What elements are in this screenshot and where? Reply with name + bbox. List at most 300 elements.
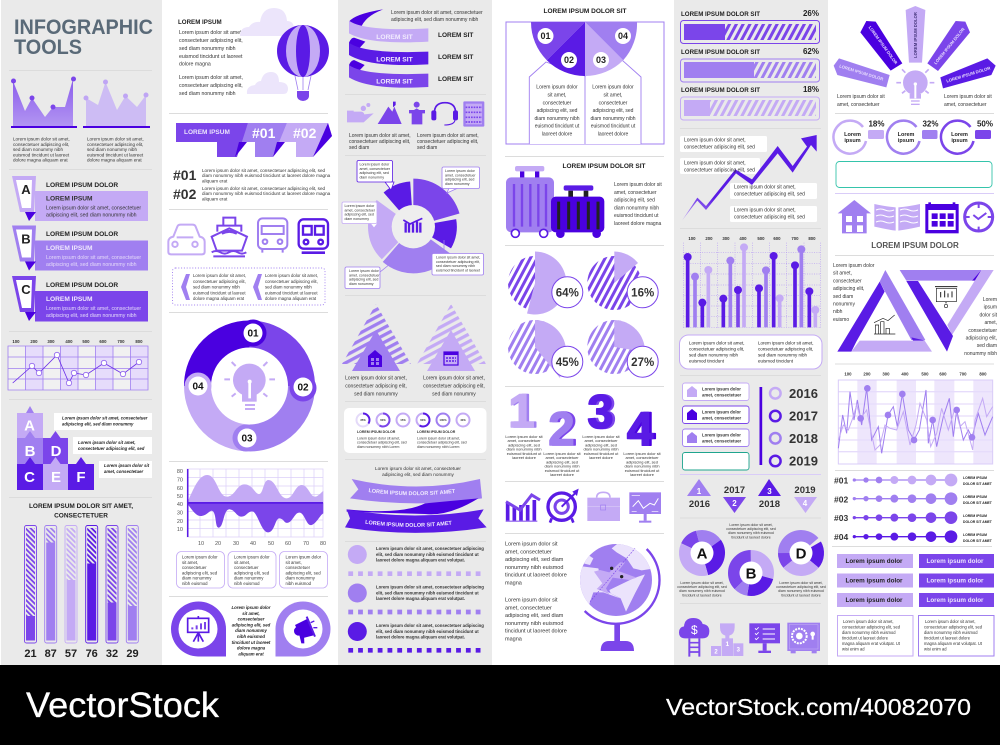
pin note: sit amet, [242, 611, 260, 616]
triangle captions: consectetuer adipiscing elit, [345, 384, 407, 390]
hatched bars chart: 76 [86, 648, 98, 660]
button grid: Lorem ipsum dolor [926, 597, 984, 604]
icon: light bulb [224, 362, 275, 410]
letter blocks: Lorem ipsum dolor sit amet, consectetuer [62, 416, 147, 420]
panel: small donuts: 15% [400, 418, 406, 422]
arrow chart: consectetuer adipiscing elit, sed [734, 214, 805, 220]
quadrant panel: Lorem ipsum dolor [592, 85, 634, 91]
quadrant panel: 01 [540, 31, 551, 41]
chart note box: sed diam nonummy nibh [758, 352, 808, 358]
spiral ribbon: LOREM SIT [438, 54, 473, 61]
exploded pie chart: adipiscing elit, sed [360, 171, 389, 175]
exploded pie chart: euismod tincidunt ut laoreet [436, 268, 480, 272]
bars heading: CONSECTETUER [54, 512, 108, 520]
number captions: laoreet dolore [550, 472, 574, 477]
intro text: Lorem ipsum dolor sit amet, [179, 30, 243, 36]
line chart: 300 [47, 339, 55, 344]
triangle right text: amet, [984, 320, 997, 326]
panel: small donuts: 40% [460, 418, 466, 422]
triangle captions: sed diam nonummy [354, 392, 398, 398]
triangle years: 2018 [759, 499, 780, 510]
triangle right text: consectetuer [968, 328, 997, 334]
3D numbers: 2 [551, 402, 577, 455]
curved ribbon banners: LOREM IPSUM DOLOR SIT AMET [365, 520, 452, 527]
number captions: amet, consectetuer [625, 455, 659, 460]
ribbon header: #01 [252, 125, 276, 141]
donut with steps: 04 [192, 382, 204, 392]
lollipop chart: 500 [757, 236, 765, 241]
icons: finance row: $ [691, 623, 698, 637]
pin: presentation [171, 602, 226, 656]
ribbon header: #02 [293, 125, 317, 141]
progress bars: LOREM IPSUM DOLOR SIT [681, 11, 760, 18]
globe text: tincidunt ut laoreet dolore [505, 629, 567, 635]
wave chart: 20 [215, 541, 221, 547]
line chart [8, 339, 148, 390]
wave chart notes: Lorem ipsum dolor [182, 554, 218, 560]
text boxes: Lorem ipsum dolor sit amet, [843, 619, 894, 624]
hash list [173, 167, 331, 202]
panel: B: B [21, 232, 31, 246]
list with circles: elit, sed diam nonummy nibh euismod tincidunt ut [376, 552, 479, 557]
quadrant panel: sit amet, [604, 92, 622, 98]
exploded pie chart: sed diam nonummy nibh [436, 264, 475, 268]
house label boxes: amet, consectetuer [702, 392, 741, 398]
globe text: magna [505, 580, 523, 586]
icons: chart, target, briefcase, monitor [506, 489, 661, 523]
panel: C [12, 276, 148, 322]
quadrant panel: 02 [564, 55, 574, 65]
spiral ribbon: LOREM SIT [376, 56, 414, 64]
panel: small donuts: diam nonummy nibh Lorem [357, 445, 399, 449]
curved ribbon banners: LOREM IPSUM DOLOR SIT AMET [368, 488, 455, 496]
chart note box: Lorem ipsum dolor sit amet, [689, 340, 745, 346]
arrow chart: consectetuer adipiscing elit, sed [684, 144, 755, 150]
chart note box: sed diam nonummy nibh [689, 352, 739, 358]
arrow chart: Lorem ipsum dolor sit amet, [734, 184, 796, 190]
panel: small donuts: LOREM IPSUM DOLOR [417, 430, 456, 434]
dotted note box: dolore magna aliquam erat [193, 296, 245, 301]
panel: A: A [21, 182, 31, 197]
triangle years: 4 [803, 499, 808, 508]
house label boxes: Lorem ipsum dolor [702, 386, 741, 392]
footer bar: VectorStock.com/40082070 [666, 694, 971, 720]
dotted note box: euismod tincidunt ut laoreet [193, 290, 246, 295]
wave chart notes: diam nonummy [286, 576, 316, 581]
wave chart notes: consectetuer [182, 565, 207, 570]
house label boxes: amet, consectetuer [702, 438, 741, 444]
number captions: diam nonummy nibh [583, 447, 619, 452]
triangle: calendar [417, 304, 486, 371]
wave chart: 10 [177, 527, 183, 533]
multi-line chart: 400 [901, 372, 909, 376]
arrow chart: Lorem ipsum dolor sit amet, [684, 138, 746, 144]
percent rings: 50% [977, 120, 993, 128]
area chart captions: consectetuer adipiscing elit, [87, 142, 143, 147]
donut: D: D [796, 546, 807, 562]
triangle right text: adipiscing elit, [966, 336, 997, 342]
year timeline [760, 386, 818, 468]
triangle captions: Lorem ipsum dolor sit amet, [423, 376, 485, 382]
intro text: Lorem ipsum dolor sit amet, [179, 75, 243, 81]
triangle years: 2019 [794, 485, 816, 496]
3D numbers [508, 384, 656, 455]
pie: 64% [508, 252, 583, 314]
wave chart: 80 [177, 469, 183, 475]
wave chart notes: diam nonummy [182, 576, 212, 581]
chart note box: consectetuer adipiscing elit, [758, 346, 813, 352]
text boxes: magna aliquam erat volutpat. Ut [842, 641, 901, 646]
icons: house, book, calendar, clock [838, 200, 993, 233]
wave chart notes: Lorem ipsum dolor [234, 554, 270, 560]
3D numbers: 3 [590, 385, 616, 438]
area chart captions: euismod tincidunt ut laoreet [13, 152, 70, 157]
icons caption: sed diam [349, 145, 369, 151]
percent rings: 32% [922, 120, 938, 128]
exploded pie chart: amet, consectetuer [349, 273, 380, 277]
dot timelines: DOLOR SIT AMET [963, 520, 993, 524]
fan of arrows with bulb: LOREM IPSUM DOLOR [933, 27, 966, 65]
lollipop chart: 600 [773, 236, 781, 241]
donut captions: Lorem ipsum dolor sit amet, [729, 523, 773, 527]
globe text: Lorem ipsum dolor sit [505, 542, 558, 548]
intro text: sed diam nonummy nibh [179, 46, 236, 52]
percent rings: ipsum [898, 138, 914, 144]
panel: small donuts: consectetuer adipiscing elit, sed [417, 441, 467, 445]
letter blocks: consectetuer adipiscing elit, sed [78, 446, 145, 451]
area chart captions [13, 136, 144, 163]
panel: A: LOREM IPSUM [46, 196, 93, 202]
quadrant panel: consectetuer [599, 100, 628, 106]
number captions: Lorem ipsum dolor sit [582, 434, 620, 439]
lollipop chart [683, 236, 821, 328]
icon: luggage [506, 166, 604, 238]
globe text: amet, consectetuer [505, 549, 552, 555]
panel: A: Lorem ipsum dolor sit amet, consectetuer [46, 206, 141, 212]
number captions: diam nonummy nibh [624, 464, 660, 469]
panel: small donuts: LOREM IPSUM DOLOR [357, 430, 396, 434]
arrow chart: Lorem ipsum dolor sit amet, [734, 208, 796, 214]
dot timelines: #03 [834, 513, 848, 523]
triangle left text: euismo [833, 317, 849, 323]
list with circles: laoreet dolore magna aliquam erat volutpat. [376, 596, 465, 601]
number captions: Lorem ipsum dolor sit [505, 434, 543, 439]
wave chart notes: sit amet, [182, 560, 198, 565]
number captions: euismod tincidunt ut [625, 468, 660, 473]
panel: small donuts [344, 408, 486, 453]
wave chart notes: adipiscing elit, sed [286, 570, 321, 575]
wave chart: 50 [177, 494, 183, 500]
donut captions: consectetuer adipiscing elit, sed [726, 527, 776, 531]
list with circles: Lorem ipsum dolor sit amet, consectetuer adipiscing [376, 623, 484, 628]
area chart captions: sed diam nonummy nibh [87, 147, 137, 152]
triangle left text: Lorem ipsum dolor [833, 263, 874, 269]
hatched bars chart: 32 [106, 648, 118, 660]
number captions: adipiscing elit, sed [508, 442, 540, 447]
list with circles: elit, sed diam nonummy nibh euismod tincidunt ut [376, 629, 479, 634]
wave chart notes: nibh euismod [286, 581, 312, 586]
chart note box: Lorem ipsum dolor sit amet, [758, 340, 814, 346]
letter blocks: adipiscing elit, sed diam nonummy [62, 422, 134, 426]
triangle years: 3 [767, 487, 772, 496]
wave chart notes: consectetuer [286, 565, 311, 570]
triangle left text: consectetuer [833, 278, 862, 284]
wave chart notes: Lorem ipsum dolor [286, 554, 321, 560]
dotted note box: Lorem ipsum dolor sit amet, [265, 273, 318, 278]
pin note: dolore magna [237, 646, 266, 651]
exploded pie chart: Lorem ipsum dolor [349, 269, 379, 273]
triangle right text: dolor sit [979, 312, 998, 318]
percent rings: ipsum [951, 138, 968, 144]
house label boxes: amet, consectetuer [702, 416, 741, 420]
hatched bars chart: 57 [65, 648, 77, 660]
house label boxes [682, 383, 749, 470]
list with circles: elit, sed diam nonummy nibh euismod tincidunt ut [376, 590, 479, 595]
wave chart: 10 [198, 541, 204, 547]
callouts [342, 160, 484, 288]
panel: C: adipiscing elit, sed diam nonummy nibh [46, 313, 137, 319]
icons caption: consectetuer adipiscing elit, [417, 139, 478, 145]
triangle captions: Lorem ipsum dolor sit amet, [345, 376, 407, 382]
spiral caption: adipiscing elit, sed diam nonummy nibh [391, 17, 478, 23]
exploded pie chart: amet, consectetuer [360, 167, 391, 171]
area chart captions: euismod tincidunt ut laoreet [87, 152, 144, 157]
quadrant panel: euismod tincidunt ut [535, 124, 580, 130]
spiral ribbon: LOREM SIT [438, 76, 473, 83]
wave chart: 30 [233, 541, 239, 547]
bars heading: LOREM IPSUM DOLOR SIT AMET, [29, 503, 133, 510]
donut captions: Lorem ipsum dolor sit amet, [779, 581, 823, 585]
dot timelines: LOREM IPSUM [963, 533, 987, 537]
lollipop chart: 200 [705, 236, 713, 241]
text boxes: diam nonummy nibh euismod [924, 630, 978, 635]
quadrant panel: adipiscing elit, sed [537, 108, 578, 114]
triangle left text: nibh [833, 309, 843, 315]
multi-line chart: 200 [863, 372, 871, 376]
dot timelines: DOLOR SIT AMET [963, 482, 993, 486]
number captions: laoreet dolore [512, 455, 536, 460]
button grid: Lorem ipsum dolor [845, 578, 903, 584]
icon: presentation board [935, 287, 957, 308]
chart note box: euismod tincidunt [689, 358, 725, 364]
lollipop chart: 100 [688, 236, 696, 241]
area chart captions: Lorem ipsum dolor sit amet, [13, 136, 70, 142]
intro text: dolore magna [179, 62, 211, 68]
arrow chart: consectetuer adipiscing elit, sed [684, 168, 755, 174]
percent rings: Lorem [951, 132, 968, 138]
intro text: consectetuer adipiscing elit, [179, 38, 243, 44]
quadrant panel: consectetuer [543, 100, 572, 106]
hash list: Lorem ipsum dolor sit amet, consectetuer adipiscing elit, sed [202, 168, 325, 173]
icons: finance row: 2 [714, 649, 718, 655]
quadrant panel: diam nonummy nibh [534, 116, 580, 122]
globe text: tincidunt ut laoreet dolore [505, 573, 567, 579]
quadrant panel: sit amet, [548, 92, 566, 98]
area charts [11, 76, 150, 128]
ribbon caption: Lorem ipsum dolor sit amet, consectetuer [375, 466, 461, 471]
hash list: diam nonummy nibh euismod tincidunt ut laoreet dolore magna [202, 191, 331, 196]
panel: small donuts: 35% [360, 418, 366, 422]
exploded pie chart: adipiscing elit, sed [344, 213, 374, 217]
number captions: adipiscing elit, sed [546, 459, 578, 464]
number captions: amet, consectetuer [584, 438, 618, 443]
panel: B: LOREM IPSUM [46, 245, 93, 252]
panel: small donuts: 60% [380, 418, 386, 422]
progress bars: 26% [803, 9, 819, 18]
globe text: nonummy nibh euismod [505, 621, 563, 627]
wave chart notes: nibh euismod [234, 581, 260, 586]
donut captions: tincidunt ut laoreet dolore [682, 593, 722, 597]
luggage text: laoreet dolore magna [614, 221, 661, 227]
percent rings: 18% [868, 120, 884, 128]
icons: finance row [679, 618, 820, 657]
text boxes: Lorem ipsum dolor sit amet, [925, 619, 976, 624]
exploded pie chart: diam nonummy [344, 217, 369, 221]
hash list: #02 [173, 186, 197, 202]
triangle right text: Lorem [983, 297, 997, 303]
icons: finance row: 3 [737, 648, 741, 654]
house label boxes: Lorem ipsum dolor [702, 410, 741, 414]
triangle captions: consectetuer adipiscing elit, [423, 384, 485, 390]
intro text: euismod tincidunt ut laoreet [179, 54, 243, 60]
panel: B: LOREM IPSUM DOLOR [46, 231, 118, 238]
exploded pie chart: consectetuer adipiscing elit, [436, 260, 480, 264]
wave chart notes: adipiscing elit, sed [182, 570, 218, 575]
panel: B [12, 226, 148, 270]
wave chart [177, 469, 326, 547]
letter blocks: amet, consectetuer [104, 469, 143, 474]
hatched bars chart: 29 [126, 648, 139, 660]
hash list: diam nonummy nibh euismod tincidunt ut laoreet dolore magna [202, 173, 331, 178]
triangle years: 2 [732, 499, 737, 508]
donut captions [677, 523, 826, 597]
triangle left text: sit amet, [833, 271, 852, 277]
footer bar [0, 665, 1000, 745]
wave chart notes: diam nonummy [234, 576, 264, 581]
pin note: Lorem ipsum dolor [232, 605, 270, 610]
triangle years: 1 [697, 487, 702, 496]
dot timelines: DOLOR SIT AMET [963, 539, 993, 543]
pie: 64%: 64% [556, 288, 579, 300]
list with circles: Lorem ipsum dolor sit amet, consectetuer adipiscing [376, 584, 484, 590]
donut captions: diam nonummy nibh euismod [778, 589, 824, 593]
text boxes: wisi enim ad [842, 646, 865, 652]
number captions: euismod tincidunt ut [584, 451, 619, 456]
number captions: laoreet dolore [630, 472, 654, 477]
button grid: Lorem ipsum dolor [926, 558, 984, 565]
letter blocks: B [25, 443, 36, 460]
area chart captions: Lorem ipsum dolor sit amet, [87, 136, 144, 142]
panel: A: LOREM IPSUM DOLOR [46, 182, 118, 189]
icon: balloon and clouds [240, 8, 329, 101]
wave chart: 50 [268, 541, 274, 547]
triangle: house [342, 304, 411, 371]
exploded pie chart: Lorem ipsum dolor [344, 204, 374, 208]
spiral ribbon [349, 9, 473, 88]
quadrant panel: laoreet dolore [542, 132, 573, 138]
fan of arrows with bulb [834, 6, 996, 105]
panel: B: adipiscing elit, sed diam nonummy nibh [46, 262, 137, 268]
text boxes: tincidunt ut laoreet dolore [924, 636, 971, 640]
title [14, 16, 153, 59]
triangle left text: sed diam [833, 294, 853, 300]
triangle years: 2016 [689, 499, 710, 510]
luggage text: euismod tincidunt ut [614, 213, 659, 219]
dot timelines: LOREM IPSUM [963, 495, 987, 499]
donut: B [727, 549, 775, 597]
donut with steps: 03 [241, 434, 253, 444]
fan of arrows with bulb: LOREM IPSUM DOLOR [946, 65, 991, 84]
spiral ribbon: LOREM SIT [438, 32, 473, 39]
area chart captions: dolore magna aliquam erat [87, 158, 142, 163]
area chart captions: dolore magna aliquam erat [13, 158, 68, 163]
quadrant panel: adipiscing elit, sed [593, 108, 634, 114]
impossible triangles [837, 270, 994, 352]
panel: small donuts: Lorem ipsum dolor sit amet, [417, 436, 460, 440]
letter blocks: F [76, 469, 86, 486]
hatched bars chart [24, 526, 139, 660]
lollipop chart: 300 [722, 236, 730, 241]
pin note: consectetuer [238, 617, 265, 622]
panel: A: adipiscing elit, sed diam nonummy nibh [46, 212, 137, 218]
number captions: Lorem ipsum dolor sit [623, 451, 661, 456]
multi-line chart [838, 372, 993, 464]
dotted note box: consectetuer adipiscing elit, [193, 279, 246, 284]
area chart captions: sed diam nonummy nibh [13, 147, 63, 152]
fan captions: Lorem ipsum dolor sit [837, 94, 885, 100]
year timeline: 2017 [789, 408, 818, 424]
pin note: nibh euismod [237, 634, 265, 639]
wave chart notes: sit amet, [234, 560, 250, 565]
triangle years: 2017 [724, 485, 745, 496]
panel: A [12, 176, 148, 221]
wave chart: 40 [250, 541, 256, 547]
intro text: LOREM IPSUM [178, 19, 222, 26]
title: TOOLS [14, 36, 82, 59]
heading: quadrant: LOREM IPSUM DOLOR SIT [543, 8, 627, 15]
multi-line chart: 300 [882, 372, 890, 376]
area chart captions: consectetuer adipiscing elit, [13, 142, 69, 147]
dotted note box: consectetuer adipiscing elit, [265, 279, 318, 284]
globe text: nonummy nibh euismod [505, 565, 563, 571]
fan captions: amet, consectetuer [837, 102, 880, 108]
icon: globe [577, 542, 660, 651]
triangle right text: ipsum [984, 305, 997, 311]
wave chart: 80 [320, 541, 326, 547]
panel: small donuts: Lorem ipsum dolor sit amet, [357, 436, 400, 440]
icons caption: Lorem ipsum dolor sit amet, [349, 133, 411, 139]
pie: 45%: 45% [556, 357, 579, 369]
text boxes: consectetuer adipiscing elit, sed [924, 624, 983, 630]
triangle right text: sed diam [977, 343, 997, 349]
fan of arrows with bulb: LOREM IPSUM DOLOR [913, 12, 918, 58]
wave chart: 20 [177, 519, 183, 525]
donut: D [777, 529, 825, 577]
quadrant panel: diam nonummy nibh [590, 116, 636, 122]
footer bar: VectorStock [26, 686, 220, 725]
donut with steps: 01 [247, 328, 259, 340]
arrow chart: consectetuer adipiscing elit, sed [734, 192, 805, 198]
3D numbers: 1 [511, 384, 537, 437]
fan captions: Lorem ipsum dolor sit [944, 94, 992, 100]
donut: A: A [697, 546, 708, 562]
number captions: amet, consectetuer [545, 455, 579, 460]
number captions: Lorem ipsum dolor sit [543, 451, 581, 456]
donut with steps [184, 320, 316, 452]
globe text: adipiscing elit, sed diam [505, 613, 564, 619]
icons: finance row: 1 [725, 641, 729, 648]
ribbon header [176, 123, 332, 157]
